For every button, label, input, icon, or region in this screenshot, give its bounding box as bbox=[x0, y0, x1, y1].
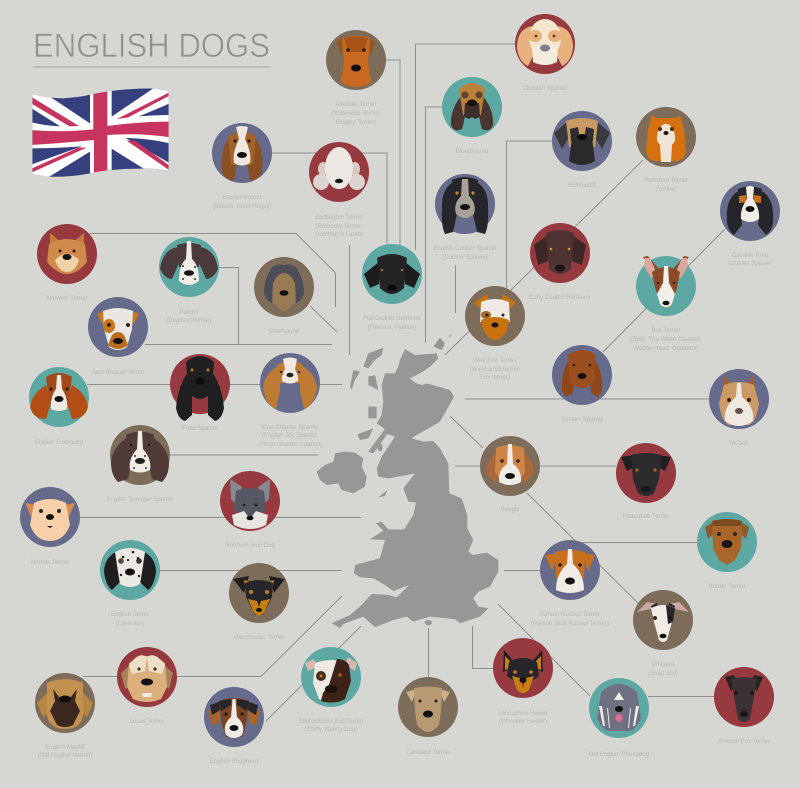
portrait: Lancashire Heeler bbox=[493, 638, 553, 698]
connector: Pit Bull, Sussex Spaniel bbox=[465, 398, 709, 400]
dog: Manchester Terrier bbox=[229, 563, 289, 641]
portrait: Field Spaniel bbox=[170, 354, 230, 421]
label: King Charles Spaniel: Prince Charles Spaniel) bbox=[258, 441, 322, 448]
dog: Northern Inuit Dog bbox=[220, 471, 280, 549]
Great Britain bbox=[332, 349, 498, 628]
connector: Norfolk Terrier, Northern Inuit Dog bbox=[80, 516, 361, 518]
label: Jack Russell Terrier: Jack Russell Terrier bbox=[91, 369, 145, 376]
label: Curly Coated Retriever: Curly Coated Retriever bbox=[529, 294, 591, 301]
dog: English Foxhound bbox=[29, 367, 89, 446]
icon: waving UK flag bbox=[30, 87, 170, 178]
label: Bedlington Terrier: (Rothbury Terrier, bbox=[316, 223, 363, 230]
connector: Bloodhound bbox=[426, 107, 442, 343]
Northern Ireland bbox=[317, 452, 367, 493]
label: English Setter: (Laverack) bbox=[116, 620, 144, 627]
label: King Charles Spaniel: King Charles Spaniel bbox=[262, 424, 318, 431]
label: English Cocker Spaniel: (Cocker Spaniel) bbox=[442, 254, 488, 261]
label: Bloodhound: Bloodhound bbox=[456, 148, 488, 155]
portrait: Lakeland Terrier bbox=[398, 677, 458, 737]
title: ENGLISH DOGS bbox=[33, 27, 270, 65]
connector: Airedale Terrier bbox=[386, 60, 400, 248]
label: Parson Russell Terrier: Parson Russell Terrier bbox=[540, 611, 600, 618]
Arran bbox=[377, 443, 383, 451]
connector: English Setter bbox=[160, 570, 342, 572]
label: Norwich Terrier: Norwich Terrier bbox=[47, 295, 87, 302]
connector: English Mastiff bbox=[83, 676, 117, 678]
dog: Airedale Terrier bbox=[326, 30, 386, 126]
dog: Norwich Terrier bbox=[37, 224, 97, 302]
label: Clumber Spaniel: Clumber Spaniel bbox=[522, 85, 568, 92]
dog: English Mastiff bbox=[35, 673, 95, 759]
Scottish and other islands bbox=[350, 334, 452, 497]
portrait: Bullmastiff bbox=[552, 111, 612, 171]
dog: Lucas Terrier bbox=[117, 647, 177, 725]
portrait: Bloodhound bbox=[442, 77, 502, 137]
portrait: Curly Coated Retriever bbox=[530, 223, 590, 283]
label: Pit Bull: Pit bull bbox=[730, 440, 748, 447]
portrait: Manchester Terrier bbox=[229, 563, 289, 623]
portrait: Staffordshire Bull Terrier bbox=[301, 647, 361, 707]
connector: English Shepherd, Staffordshire Bull Terrier bbox=[266, 626, 361, 721]
label: Wire Fox Terrier: Fox terrier) bbox=[480, 374, 510, 381]
dog: Flat Coated Retriever bbox=[362, 244, 422, 331]
portrait: English Cocker Spaniel bbox=[435, 174, 495, 234]
label: Yorkshire Terrier: (Yorkie) bbox=[656, 186, 676, 193]
label: Old English Sheepdog: Old English Sheepdog bbox=[589, 751, 649, 758]
portrait: Northern Inuit Dog bbox=[220, 471, 280, 531]
label: Airedale Terrier: (Waterside Terrier, bbox=[331, 110, 381, 117]
dog: Border Terrier bbox=[697, 512, 757, 590]
label: Bedlington Terrier: Bedlington Terrier bbox=[315, 214, 363, 221]
portrait: English Springer Spaniel bbox=[110, 425, 170, 485]
label: English Mastiff: (Old English Mastiff) bbox=[38, 752, 92, 759]
dog: Bullmastiff bbox=[552, 111, 612, 189]
dog: English Setter bbox=[100, 540, 160, 627]
connector: Norwich Terrier bbox=[90, 234, 336, 307]
dog: Yorkshire Terrier bbox=[636, 107, 696, 193]
portrait: Cavalier King Charles Spaniel bbox=[720, 181, 780, 241]
label: Bedlington Terrier: Rothbury's Lamb) bbox=[315, 231, 363, 238]
label: English Foxhound: English Foxhound bbox=[35, 439, 83, 446]
portrait: Lucas Terrier bbox=[117, 647, 177, 707]
connector: Lakeland Terrier bbox=[428, 628, 430, 677]
connector: Bedlington Terrier bbox=[348, 245, 350, 355]
connector: English Cocker Spaniel bbox=[454, 265, 456, 313]
dog: Bloodhound bbox=[442, 77, 502, 155]
label: English Mastiff: English Mastiff bbox=[45, 744, 85, 751]
dog: Basset Hound bbox=[212, 123, 272, 210]
portrait: English Setter bbox=[100, 540, 160, 600]
label: Sussex Spaniel: Sussex Spaniel bbox=[561, 416, 603, 423]
label: Otterhound: Otterhound bbox=[269, 328, 299, 335]
label: Pointer: (English Pointer) bbox=[166, 317, 212, 324]
dog: Bull Terrier bbox=[630, 256, 702, 352]
portrait: English Foxhound bbox=[29, 367, 89, 427]
portrait: Jack Russell Terrier bbox=[88, 297, 148, 357]
label: Wire Fox Terrier: (Wirehaired terrier, bbox=[470, 366, 521, 373]
dog: King Charles Spaniel bbox=[258, 353, 322, 448]
label: Whippet: Whippet bbox=[652, 661, 674, 668]
connector: Patterdale Terrier bbox=[455, 465, 616, 467]
dog: Otterhound bbox=[254, 257, 314, 335]
dog: Norfolk Terrier bbox=[20, 487, 80, 566]
portrait: Clumber Spaniel bbox=[515, 14, 575, 74]
portrait: Airedale Terrier bbox=[326, 30, 386, 90]
portrait: Parson Russell Terrier bbox=[540, 540, 600, 600]
label: Cavalier King Charles Spaniel: Charles Spaniel bbox=[728, 260, 772, 267]
label: English Setter: English Setter bbox=[111, 611, 149, 618]
connector: Parson Russell Terrier bbox=[504, 570, 540, 572]
portrait: Smooth Fox Terrier bbox=[714, 667, 774, 727]
label: Airedale Terrier: Bingley Terrier) bbox=[336, 119, 376, 126]
connector: Whippet bbox=[527, 493, 638, 603]
label: Staffordshire Bull Terrier: Staffordshire Bull Terrier bbox=[298, 718, 364, 725]
portrait: King Charles Spaniel bbox=[260, 353, 320, 413]
portrait: Sussex Spaniel bbox=[552, 345, 612, 405]
label: Yorkshire Terrier: Yorkshire Terrier bbox=[644, 177, 688, 184]
portrait: Border Terrier bbox=[697, 512, 757, 572]
portrait: Whippet bbox=[633, 590, 693, 650]
label: Wire Fox Terrier: Wire Fox Terrier bbox=[473, 357, 517, 364]
portrait: Bull Terrier bbox=[636, 256, 696, 316]
connector lines bbox=[80, 44, 725, 721]
label: Manchester Terrier: Manchester Terrier bbox=[234, 634, 284, 641]
portrait: Yorkshire Terrier bbox=[636, 107, 696, 167]
dog: Lakeland Terrier bbox=[398, 677, 458, 756]
portrait: Pit Bull bbox=[709, 369, 769, 429]
dog: Whippet bbox=[633, 590, 693, 677]
label: Lucas Terrier: Lucas Terrier bbox=[129, 718, 165, 725]
label: Lancashire Heeler: Lancashire Heeler bbox=[498, 710, 548, 717]
dog: Clumber Spaniel bbox=[515, 14, 575, 92]
label: King Charles Spaniel: (English Toy Spaniel, bbox=[262, 432, 319, 439]
label: Flat Coated Retriever: Flat Coated Retriever bbox=[363, 315, 421, 322]
label: English Cocker Spaniel: English Cocker Spaniel bbox=[433, 245, 497, 252]
connector: Bullmastiff bbox=[506, 141, 552, 288]
portrait: Patterdale Terrier bbox=[616, 443, 676, 503]
connector: Lancashire Heeler bbox=[472, 626, 493, 668]
portrait: Wire Fox Terrier bbox=[465, 286, 525, 346]
label: Airedale Terrier: Airedale Terrier bbox=[335, 101, 377, 108]
dog: Patterdale Terrier bbox=[616, 443, 676, 520]
dog: Beagle bbox=[480, 436, 540, 513]
connector: Basset Hound bbox=[272, 153, 387, 245]
dog: Wire Fox Terrier bbox=[465, 286, 525, 381]
label: Bull Terrier: Wedge Head, Gladiator) bbox=[633, 345, 699, 352]
connector: Lucas Terrier bbox=[177, 596, 342, 676]
connector: English Springer Spaniel bbox=[170, 454, 318, 456]
portrait: Norfolk Terrier bbox=[20, 487, 80, 547]
dog: Field Spaniel bbox=[170, 354, 230, 432]
label: Lancashire Heeler: (Ormskirk Heeler) bbox=[499, 718, 547, 725]
dog: Pit Bull bbox=[709, 369, 769, 447]
label: Field Spaniel: Field Spaniel bbox=[182, 425, 218, 432]
label: Parson Russell Terrier: (Parson Jack Russell Terrier) bbox=[531, 620, 609, 627]
label: Flat Coated Retriever: (Flatcoat, Flatties) bbox=[368, 324, 416, 331]
dog: Smooth Fox Terrier bbox=[714, 667, 774, 745]
label: English Shepherd: English Shepherd bbox=[210, 758, 258, 765]
dog: English Springer Spaniel bbox=[107, 425, 173, 503]
label: Patterdale Terrier: Patterdale Terrier bbox=[623, 513, 669, 520]
dog: Old English Sheepdog bbox=[589, 678, 649, 758]
label: Bullmastiff: Bullmastiff bbox=[568, 182, 596, 189]
label: English Springer Spaniel: English Springer Spaniel bbox=[107, 496, 173, 503]
label: Bull Terrier: Bull Terrier bbox=[651, 327, 681, 334]
portrait: Old English Sheepdog bbox=[589, 678, 649, 738]
label: Smooth Fox Terrier: Smooth Fox Terrier bbox=[718, 738, 770, 745]
label: Northern Inuit Dog: Northern Inuit Dog bbox=[225, 542, 275, 549]
label: Cavalier King Charles Spaniel: Cavalier King bbox=[732, 252, 768, 259]
portrait: Beagle bbox=[480, 436, 540, 496]
connector: Smooth Fox Terrier bbox=[648, 696, 714, 698]
connector: Cavalier King Charles Spaniel bbox=[603, 229, 725, 352]
dog: Cavalier King Charles Spaniel bbox=[720, 181, 780, 267]
connector: Beagle to the map bbox=[450, 416, 483, 448]
portrait: English Mastiff bbox=[35, 673, 95, 733]
label: Basset Hound: (Basset, Hush Puppy) bbox=[212, 203, 272, 210]
connector: Clumber Spaniel bbox=[416, 44, 515, 250]
portrait: Bedlington Terrier bbox=[309, 142, 369, 202]
map of the United Kingdom bbox=[317, 334, 498, 628]
connector: Pointer bbox=[219, 268, 238, 344]
connector: Otterhound bbox=[310, 306, 337, 332]
dog: Curly Coated Retriever bbox=[529, 223, 591, 301]
dog: Staffordshire Bull Terrier bbox=[298, 647, 364, 733]
connector: Old English Sheepdog bbox=[498, 604, 590, 696]
portrait: Pointer bbox=[159, 237, 219, 297]
Isle of Wight bbox=[425, 620, 432, 625]
label: Whippet: (Snap dog) bbox=[648, 670, 678, 677]
label: Pointer: Pointer bbox=[179, 309, 199, 316]
dog: Jack Russell Terrier bbox=[88, 297, 148, 376]
dog: Sussex Spaniel bbox=[552, 345, 612, 423]
portrait: Basset Hound bbox=[212, 123, 272, 183]
portrait: English Shepherd bbox=[204, 687, 264, 747]
dog: English Cocker Spaniel bbox=[433, 174, 497, 261]
connector: Yorkshire Terrier bbox=[445, 160, 643, 355]
portrait: Norwich Terrier bbox=[37, 224, 97, 284]
label: Bull Terrier: (Bully, The White Cavalier, bbox=[630, 336, 702, 343]
connector: Border Terrier bbox=[570, 542, 697, 544]
label: Beagle: Beagle bbox=[501, 506, 520, 513]
dog: Parson Russell Terrier bbox=[531, 540, 609, 627]
label: Border Terrier: Border Terrier bbox=[708, 583, 746, 590]
label: Staffordshire Bull Terrier: (Staffy, Nanny Dog) bbox=[305, 726, 357, 733]
label: Basset Hound: Basset Hound bbox=[223, 194, 261, 201]
portrait: Flat Coated Retriever bbox=[362, 244, 422, 304]
dog: English Shepherd bbox=[204, 687, 264, 765]
connector: Jack Russell Terrier bbox=[145, 344, 332, 346]
dog: Pointer bbox=[159, 237, 219, 324]
label: Norfolk Terrier: Norfolk Terrier bbox=[31, 559, 69, 566]
portrait: Otterhound bbox=[254, 257, 314, 317]
dog: Lancashire Heeler bbox=[493, 638, 553, 725]
dog: Bedlington Terrier bbox=[309, 142, 369, 238]
label: Lakeland Terrier: Lakeland Terrier bbox=[406, 749, 450, 756]
connector: English Foxhound, Field Spaniel, King Charles Spaniel bbox=[87, 384, 342, 386]
